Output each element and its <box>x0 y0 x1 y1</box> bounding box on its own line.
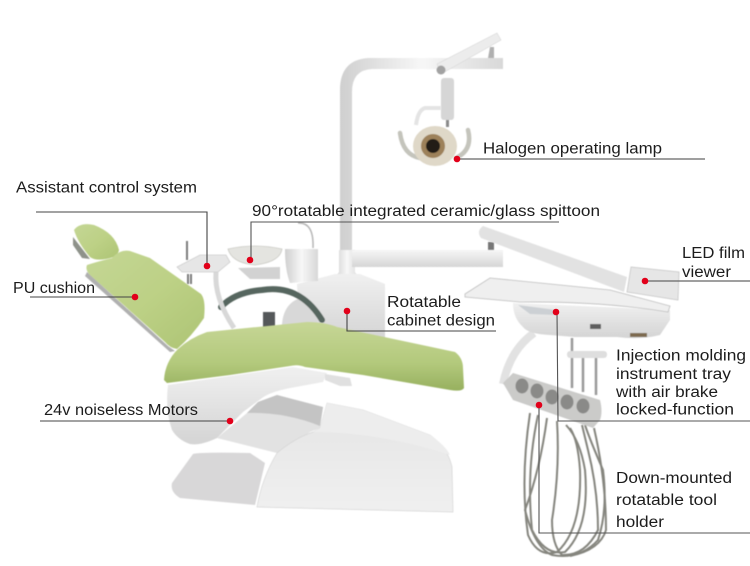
callout: spittoon <box>247 203 600 263</box>
assistant control tray <box>177 255 230 272</box>
holder arm <box>503 333 534 384</box>
arm bracket <box>488 47 494 58</box>
chair lift link <box>217 395 323 453</box>
callout: LED film viewer: LED film <box>682 245 745 262</box>
callout: down-mounted tool holder: holder <box>616 514 664 531</box>
lamp handles <box>400 130 469 158</box>
callout: PU cushion: PU cushion <box>13 280 95 297</box>
callout: down-mounted tool holder <box>536 402 750 533</box>
spittoon column <box>285 249 318 283</box>
upper arm <box>437 33 501 74</box>
tray support arm <box>352 250 503 267</box>
horizontal tray arm and cabinet <box>221 242 503 340</box>
instrument stems <box>187 241 191 284</box>
base top panel <box>313 403 450 455</box>
headrest support <box>73 237 90 259</box>
callout: 24v noiseless motors <box>40 402 233 424</box>
seat support <box>325 374 352 386</box>
lamp reflector <box>421 134 445 158</box>
tray port <box>590 324 601 329</box>
base cover <box>257 403 453 512</box>
instrument tray assembly <box>465 226 679 395</box>
LED film viewer <box>627 267 679 300</box>
control buttons <box>518 305 556 315</box>
spittoon lower tray <box>238 267 280 279</box>
tray body <box>513 303 670 338</box>
callout: rotatable cabinet design <box>344 294 496 331</box>
faucet <box>298 223 313 248</box>
holder bar <box>503 373 602 428</box>
cabinet side panel <box>282 298 318 334</box>
callout: rotatable cabinet design: Rotatable <box>387 294 461 311</box>
pump <box>263 312 275 328</box>
chair under-seat shell <box>167 367 327 444</box>
lamp stem <box>441 78 454 120</box>
callout: down-mounted tool holder: rotatable tool <box>616 492 717 509</box>
lamp head <box>413 126 457 166</box>
callout: assistant control system: Assistant control system <box>16 180 197 196</box>
chair <box>73 224 464 512</box>
base foot plate <box>172 453 265 505</box>
arm joint <box>488 242 494 250</box>
lift link shadow <box>247 395 323 426</box>
dark hose <box>221 289 322 320</box>
lamp yoke <box>416 108 441 125</box>
callout: halogen operating lamp <box>454 140 705 162</box>
tray arm <box>479 226 627 292</box>
halogen lamp <box>400 108 469 166</box>
callout: 24v noiseless motors: 24v noiseless Motors <box>44 402 198 419</box>
callout: injection molding instrument tray: instrument tray <box>616 366 731 383</box>
tray top <box>465 278 670 312</box>
seat cushion <box>164 322 464 391</box>
tool rods <box>572 338 596 395</box>
hoses <box>524 413 606 556</box>
connectors <box>630 333 647 337</box>
callout: rotatable cabinet design: cabinet design <box>387 312 495 330</box>
spittoon bowl <box>228 246 282 265</box>
callout: injection molding instrument tray: with air brake <box>615 384 718 401</box>
callout: down-mounted tool holder: Down-mounted <box>616 470 732 487</box>
headrest cushion <box>74 224 119 260</box>
callout: injection molding instrument tray: locked-function <box>616 402 734 418</box>
callout: LED film viewer: viewer <box>682 264 731 281</box>
lamp bulb <box>426 139 440 153</box>
backrest frame <box>85 272 175 352</box>
lamp post and arm <box>334 33 503 282</box>
spittoon and assistant tray <box>177 223 318 328</box>
lamp pin <box>446 120 449 127</box>
callout: LED film viewer <box>642 245 750 284</box>
callout: assistant control system <box>16 180 210 269</box>
post collar <box>334 250 360 280</box>
arm pivot <box>436 66 446 74</box>
callout: spittoon: 90°rotatable integrated ceramic/glass spittoon <box>252 203 600 220</box>
support rod <box>216 272 234 328</box>
holder cups <box>516 378 590 414</box>
cabinet <box>297 274 385 340</box>
tray handle <box>567 351 607 358</box>
backrest cushion <box>86 251 205 349</box>
callout: halogen operating lamp: Halogen operating lamp <box>483 140 662 158</box>
vertical post <box>340 58 503 282</box>
tool holder with hoses <box>503 373 606 556</box>
callout: PU cushion <box>13 280 138 300</box>
callout: injection molding instrument tray: Injection molding <box>616 348 746 364</box>
callout: injection molding instrument tray <box>553 309 750 421</box>
